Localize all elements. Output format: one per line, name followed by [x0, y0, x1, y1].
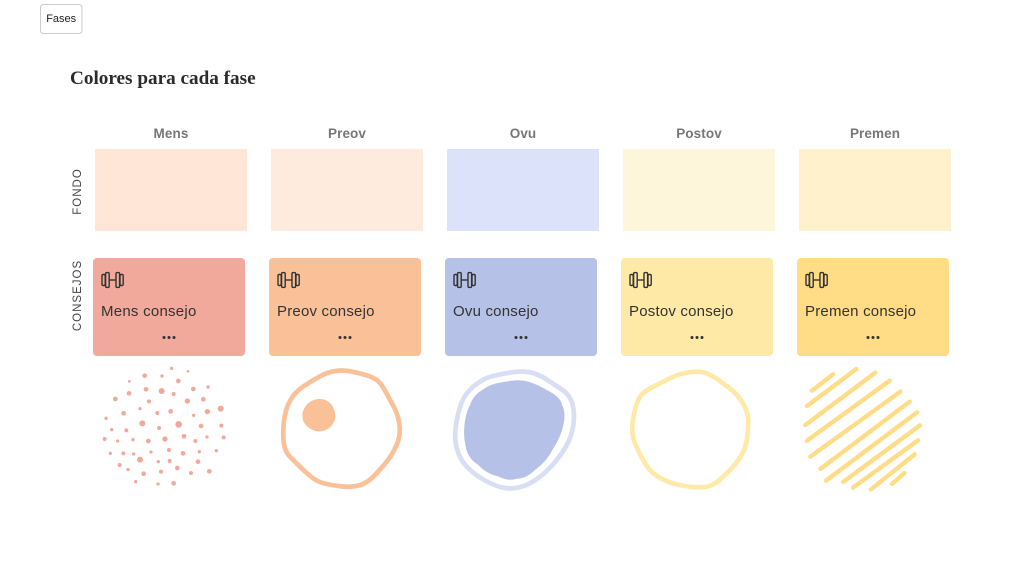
card: Mens consejo: [93, 258, 245, 356]
illustration: Preov egg outline with yolk: [283, 371, 400, 487]
card: Ovu consejo: Ovu consejo: [453, 303, 539, 320]
illustration: Ovu filled blob with ring: [455, 371, 574, 488]
background swatches: [95, 149, 951, 231]
card: Mens consejo: Mens consejo: [101, 303, 197, 320]
card: Premen consejo: [797, 258, 949, 356]
column headings: Premen: [850, 126, 900, 141]
column headings: Ovu: [510, 126, 536, 141]
title: Colores para cada fase: [70, 68, 256, 89]
card: Preov consejo: Preov consejo: [277, 303, 375, 320]
row label: fondo: FONDO: [72, 168, 84, 215]
illustration: Mens dots: [103, 367, 226, 486]
card: Premen consejo: Premen consejo: [805, 303, 916, 320]
button: Fases: Fases: [46, 13, 77, 25]
illustration: Postov outline: [632, 372, 748, 487]
column headings: Postov: [676, 126, 722, 141]
column headings: Preov: [328, 126, 366, 141]
column headings: [154, 126, 900, 141]
row label: consejos: CONSEJOS: [72, 260, 84, 331]
illustration: Premen stripes: [805, 369, 920, 489]
card: Preov consejo: [269, 258, 421, 356]
card: Ovu consejo: [445, 258, 597, 356]
card: Postov consejo: Postov consejo: [629, 303, 734, 320]
button: Fases: [40, 4, 82, 34]
column headings: Mens: [154, 126, 188, 141]
card: Postov consejo: [621, 258, 773, 356]
